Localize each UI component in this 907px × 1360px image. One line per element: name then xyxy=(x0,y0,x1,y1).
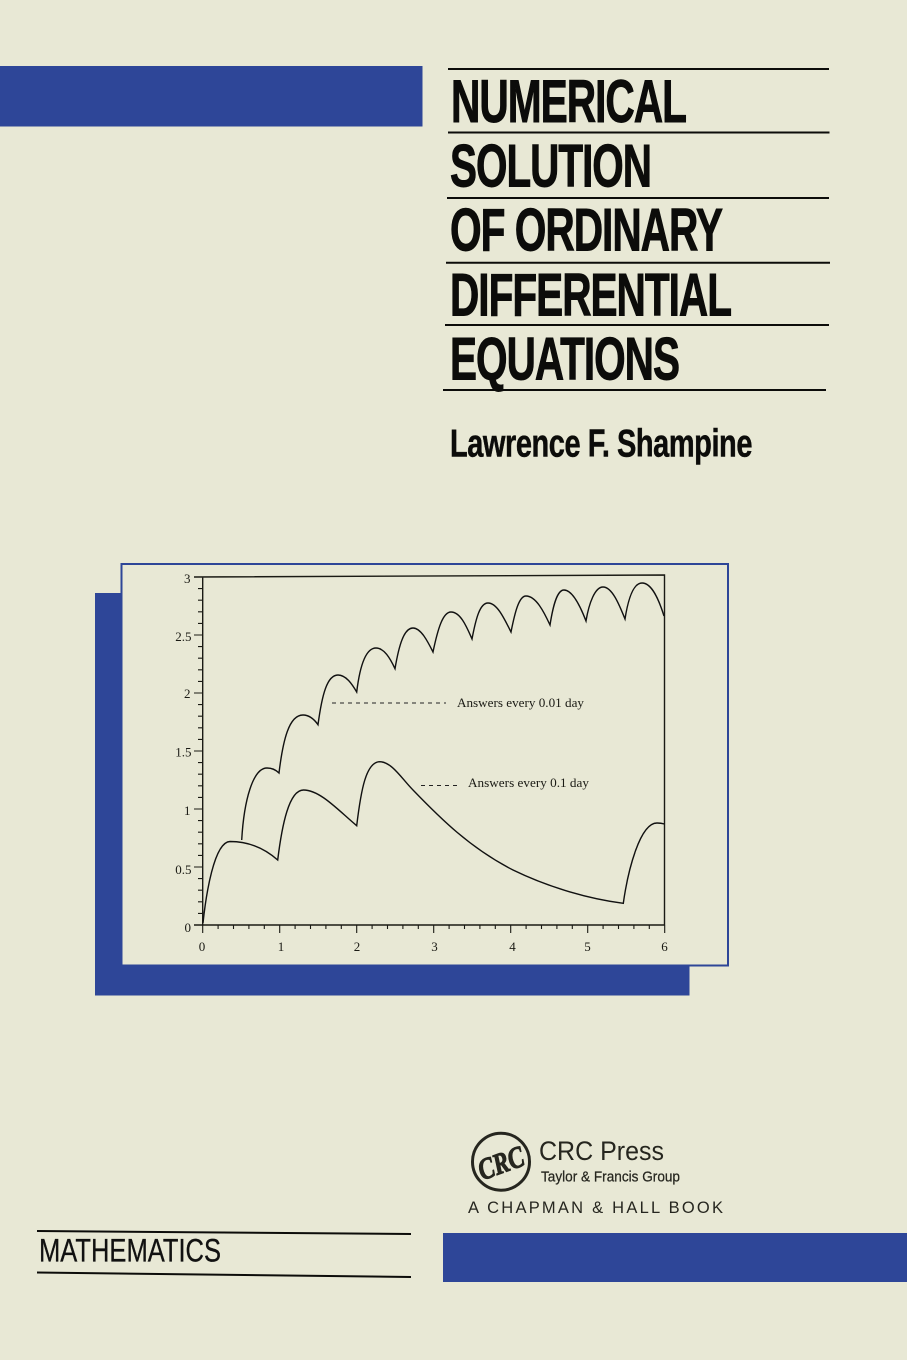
author: Lawrence F. Shampine xyxy=(450,423,752,466)
callout: answers every 0.01 day: Answers every 0.01 day xyxy=(457,695,584,710)
blue offset block behind chart xyxy=(95,593,690,996)
y axis labels xyxy=(175,571,192,935)
bottom blue bar xyxy=(443,1233,907,1282)
x axis labels: 3 xyxy=(431,939,438,954)
title line: Differential: DIFFERENTIAL xyxy=(450,261,731,328)
curve: answers every 0.01 day xyxy=(242,583,664,840)
title line: Equations: EQUATIONS xyxy=(450,326,679,393)
x axis labels: 2 xyxy=(354,939,360,954)
line chart xyxy=(175,571,668,954)
x axis labels: 6 xyxy=(661,939,668,954)
x axis labels: 5 xyxy=(584,939,591,954)
publisher name: CRC Press xyxy=(539,1136,664,1166)
subject label xyxy=(37,1231,411,1277)
callout: answers every 0.1 day: Answers every 0.1 day xyxy=(468,775,589,790)
chart panel xyxy=(122,564,728,966)
curve: answers every 0.1 day xyxy=(203,762,664,923)
icon: CRC circle logo: CRC xyxy=(473,1140,529,1187)
y axis labels: 1 xyxy=(184,803,190,818)
y axis labels: 1.5 xyxy=(175,744,192,760)
y axis labels: 0 xyxy=(184,920,191,935)
y axis labels: 0.5 xyxy=(175,862,192,877)
x axis labels: 0 xyxy=(199,939,205,954)
axis ticks xyxy=(194,589,665,933)
y axis labels: 2.5 xyxy=(175,629,192,644)
x axis labels: 4 xyxy=(509,939,516,954)
x axis labels xyxy=(199,939,668,954)
top blue banner xyxy=(0,66,422,126)
title line: Numerical: NUMERICAL xyxy=(451,68,686,135)
publisher logo xyxy=(468,1133,723,1217)
title line: Solution: SOLUTION xyxy=(450,132,651,199)
publisher group: Taylor & Francis Group xyxy=(541,1169,680,1186)
title line: Of Ordinary: OF ORDINARY xyxy=(450,196,723,263)
x axis labels: 1 xyxy=(278,939,284,954)
subject label: MATHEMATICS xyxy=(39,1233,221,1269)
y axis labels: 3 xyxy=(184,571,190,586)
plot frame and axes xyxy=(194,575,665,925)
y axis labels: 2 xyxy=(184,686,190,701)
title block xyxy=(443,68,830,393)
imprint: A CHAPMAN & HALL BOOK xyxy=(468,1199,723,1217)
